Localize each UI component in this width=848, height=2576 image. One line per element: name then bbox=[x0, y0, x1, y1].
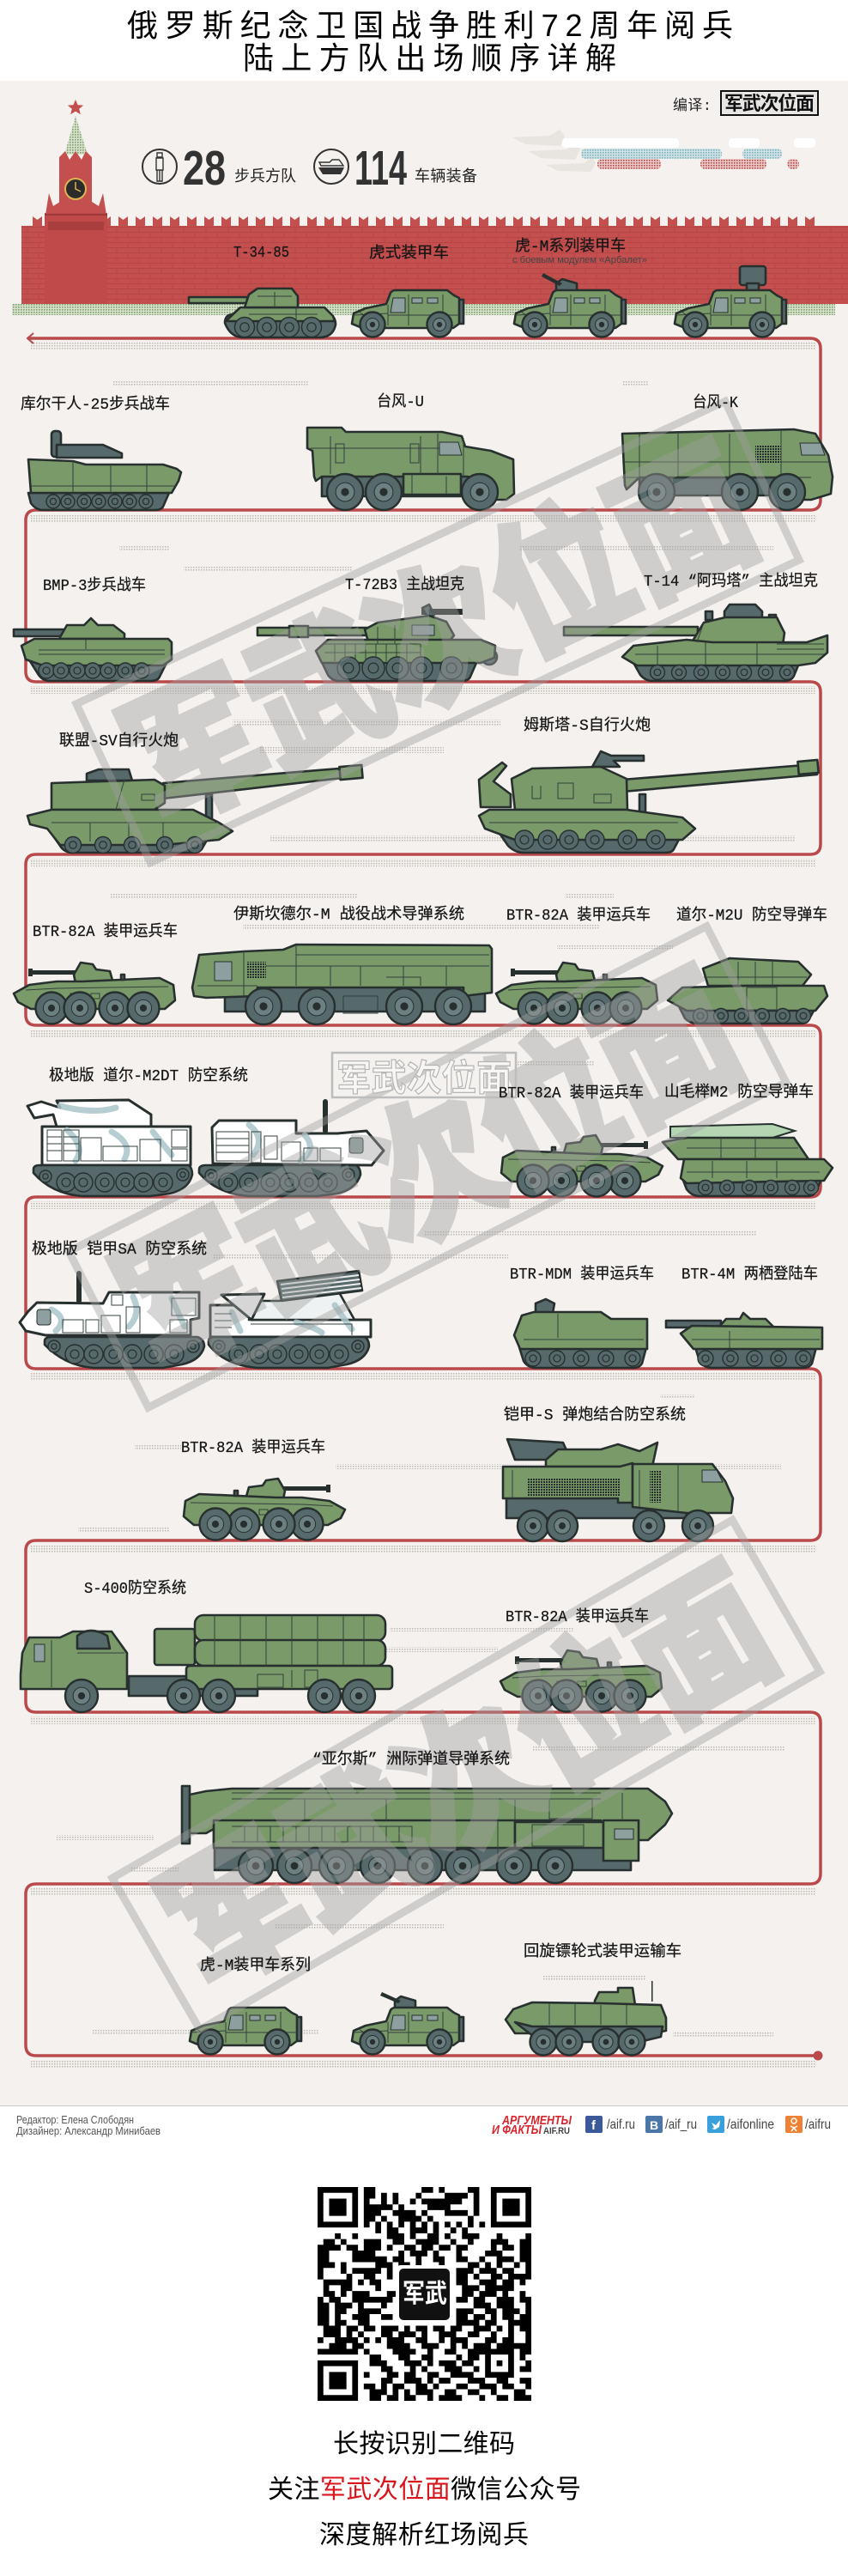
labels row 9: BTR-82A 装甲运兵车 bbox=[506, 1607, 649, 1626]
footer call to action: 关注军武次位面微信公众号 bbox=[268, 2476, 581, 2504]
vehicle: BTR-MDM bbox=[514, 1299, 647, 1368]
labels row 7: 极地版 铠甲SA 防空系统 bbox=[32, 1240, 207, 1259]
labels row 6: 山毛榉M2 防空导弹车 bbox=[664, 1083, 814, 1102]
stat: infantry columns: 步兵方队 bbox=[234, 167, 296, 186]
labels row 11: 虎-M装甲车系列 bbox=[200, 1956, 311, 1975]
labels row 8: BTR-82A 装甲运兵车 bbox=[181, 1438, 325, 1457]
small watermark logo: 军武次位面 bbox=[336, 1058, 512, 1098]
footer credits: Дизайнер: Александр Минибаев bbox=[16, 2124, 161, 2137]
labels row 5: 伊斯坎德尔-M 战役战术导弹系统 bbox=[233, 905, 464, 924]
labels row 4 bbox=[59, 716, 651, 750]
labels row 1: T-34-85 bbox=[233, 245, 289, 262]
AiF logo: AIF.RU bbox=[543, 2126, 570, 2136]
QR code: 军武 bbox=[403, 2280, 447, 2308]
stat: vehicles: 车辆装备 bbox=[415, 167, 477, 186]
vehicle: Kurganets-25 bbox=[28, 431, 181, 510]
labels row 3: BMP-3步兵战车 bbox=[43, 576, 146, 595]
vehicle: Buk-M2 bbox=[663, 1124, 833, 1196]
labels row 5: BTR-82A 装甲运兵车 bbox=[33, 922, 178, 941]
social: facebook bbox=[585, 2116, 635, 2133]
title bbox=[127, 8, 733, 76]
stat: infantry columns bbox=[142, 141, 296, 196]
vehicle: BTR-82A bbox=[14, 963, 175, 1024]
vehicle: BTR-82A bbox=[501, 1135, 663, 1197]
vehicle: Arctic Tor-M2DT bbox=[27, 1099, 384, 1196]
vehicle: Tiger armored car bbox=[352, 290, 463, 337]
footer call to action: 深度解析红场阅兵 bbox=[319, 2521, 529, 2549]
labels row 1: 虎式装甲车 bbox=[369, 244, 449, 263]
vehicle: Tiger-M with radar module bbox=[675, 266, 786, 337]
vehicle: BMP-3 bbox=[14, 618, 172, 681]
vehicle: Pantsir-S bbox=[503, 1439, 733, 1541]
labels row 1: 虎-M系列装甲车 bbox=[515, 237, 626, 256]
labels row 2 bbox=[21, 392, 738, 414]
stat: vehicles bbox=[314, 141, 477, 196]
stat: infantry columns: 28 bbox=[183, 141, 226, 196]
social: ok: /aifru bbox=[805, 2117, 831, 2132]
parade route line bbox=[26, 333, 822, 2061]
watermark: bottom: 军武次位面 bbox=[138, 1541, 800, 2019]
social: vk: /aif_ru bbox=[665, 2117, 697, 2132]
labels row 1 bbox=[233, 237, 647, 265]
footer call to action bbox=[268, 2430, 581, 2549]
vehicle: Yars ICBM carrier bbox=[182, 1786, 672, 1883]
green lawn strip bbox=[12, 304, 835, 315]
watermark: middle: 军武次位面 bbox=[94, 947, 766, 1398]
labels row 6: BTR-82A 装甲运兵车 bbox=[499, 1084, 644, 1103]
AiF logo bbox=[492, 2113, 572, 2137]
vehicle: Iskander-M bbox=[192, 945, 492, 1024]
credit: compiled by logo: 军武次位面 bbox=[724, 93, 815, 114]
footer credits: Редактор: Елена Слободян bbox=[16, 2113, 134, 2126]
vehicle: Tiger-M with Arbalet module bbox=[352, 1992, 463, 2054]
vehicle: T-72B3 bbox=[257, 605, 497, 681]
vehicle: Typhoon-K bbox=[622, 429, 833, 510]
social: facebook: /aif.ru bbox=[607, 2117, 635, 2132]
label: Yars: “亚尔斯” 洲际弹道导弹系统 bbox=[312, 1750, 510, 1769]
labels row 9 bbox=[84, 1579, 649, 1626]
labels row 3: T-14 “阿玛塔” 主战坦克 bbox=[644, 572, 818, 591]
vehicle: Typhoon-U bbox=[307, 428, 514, 510]
labels row 1: с боевым модулем «Арбалет» bbox=[512, 255, 647, 265]
title: 陆上方队出场顺序详解 bbox=[243, 40, 616, 76]
labels row 7: BTR-4M 两栖登陆车 bbox=[681, 1265, 818, 1284]
title: 俄罗斯纪念卫国战争胜利72周年阅兵 bbox=[127, 8, 733, 43]
labels row 4: 姆斯塔-S自行火炮 bbox=[524, 716, 651, 735]
social: twitter bbox=[707, 2116, 774, 2133]
vehicle: BTR-82A bbox=[496, 963, 657, 1024]
vehicle: Tiger-M bbox=[190, 2008, 301, 2054]
labels row 6 bbox=[49, 1066, 814, 1103]
footer white band bbox=[0, 2105, 848, 2576]
labels row 2: 台风-U bbox=[377, 392, 424, 411]
labels row 7: BTR-MDM 装甲运兵车 bbox=[510, 1265, 654, 1284]
labels row 5: BTR-82A 装甲运兵车 bbox=[506, 906, 651, 925]
vehicle: BTR-82A bbox=[184, 1479, 345, 1540]
flyover: planes with flag-colored stripes bbox=[512, 130, 815, 172]
labels row 8 bbox=[181, 1406, 686, 1457]
labels row 5: 道尔-M2U 防空导弹车 bbox=[676, 906, 827, 925]
Kremlin wall bbox=[21, 216, 848, 304]
page background bbox=[0, 81, 848, 2105]
AiF logo: И ФАКТЫ bbox=[492, 2123, 542, 2137]
labels row 2: 台风-K bbox=[693, 393, 738, 412]
vehicle: T-14 Armata bbox=[564, 605, 827, 681]
vehicle: Msta-S bbox=[479, 751, 819, 853]
vehicle: BTR-82A bbox=[500, 1650, 662, 1712]
vehicle: Coalition-SV bbox=[27, 765, 363, 854]
labels row 9: S-400防空系统 bbox=[84, 1579, 186, 1598]
credit: compiled by logo bbox=[673, 91, 818, 115]
labels row 8: 铠甲-S 弹炮结合防空系统 bbox=[504, 1406, 686, 1425]
AiF logo: АРГУМЕНТЫ bbox=[501, 2113, 572, 2128]
labels row 11: 回旋镖轮式装甲运输车 bbox=[524, 1942, 681, 1961]
labels row 4: 联盟-SV自行火炮 bbox=[59, 732, 179, 750]
footer credits bbox=[16, 2113, 161, 2137]
vehicle: BMD-4M bbox=[666, 1313, 822, 1368]
labels row 6: 极地版 道尔-M2DT 防空系统 bbox=[49, 1066, 248, 1085]
credit: compiled by logo: 编译: bbox=[673, 97, 712, 115]
QR code bbox=[318, 2190, 531, 2398]
labels row 3: T-72B3 主战坦克 bbox=[345, 575, 464, 594]
watermark: top: 军武次位面 bbox=[102, 422, 778, 854]
Spasskaya tower bbox=[45, 100, 107, 304]
social: twitter: /aifonline bbox=[727, 2117, 774, 2132]
labels row 7 bbox=[32, 1240, 818, 1284]
vehicle: Tor-M2U bbox=[668, 958, 827, 1024]
labels row 11 bbox=[200, 1942, 681, 1975]
vehicle: Boomerang bbox=[506, 1981, 666, 2056]
vehicle: T-34-85 bbox=[189, 289, 336, 337]
social: ok bbox=[785, 2116, 831, 2133]
footer call to action: 长按识别二维码 bbox=[333, 2430, 515, 2458]
vehicle: Arctic Pantsir-SA bbox=[20, 1271, 371, 1368]
social: vk bbox=[645, 2116, 697, 2133]
labels row 5 bbox=[33, 905, 827, 941]
vehicle: Tiger-M with Arbalet module bbox=[514, 273, 626, 337]
social: vk: В bbox=[650, 2118, 658, 2132]
decorative dotted strips bbox=[30, 343, 815, 2068]
stat: vehicles: 114 bbox=[354, 141, 407, 196]
vehicle: S-400 bbox=[21, 1615, 392, 1712]
labels row 3 bbox=[43, 572, 818, 595]
labels row 2: 库尔干人-25步兵战车 bbox=[21, 395, 170, 414]
social: facebook: f bbox=[591, 2118, 597, 2133]
